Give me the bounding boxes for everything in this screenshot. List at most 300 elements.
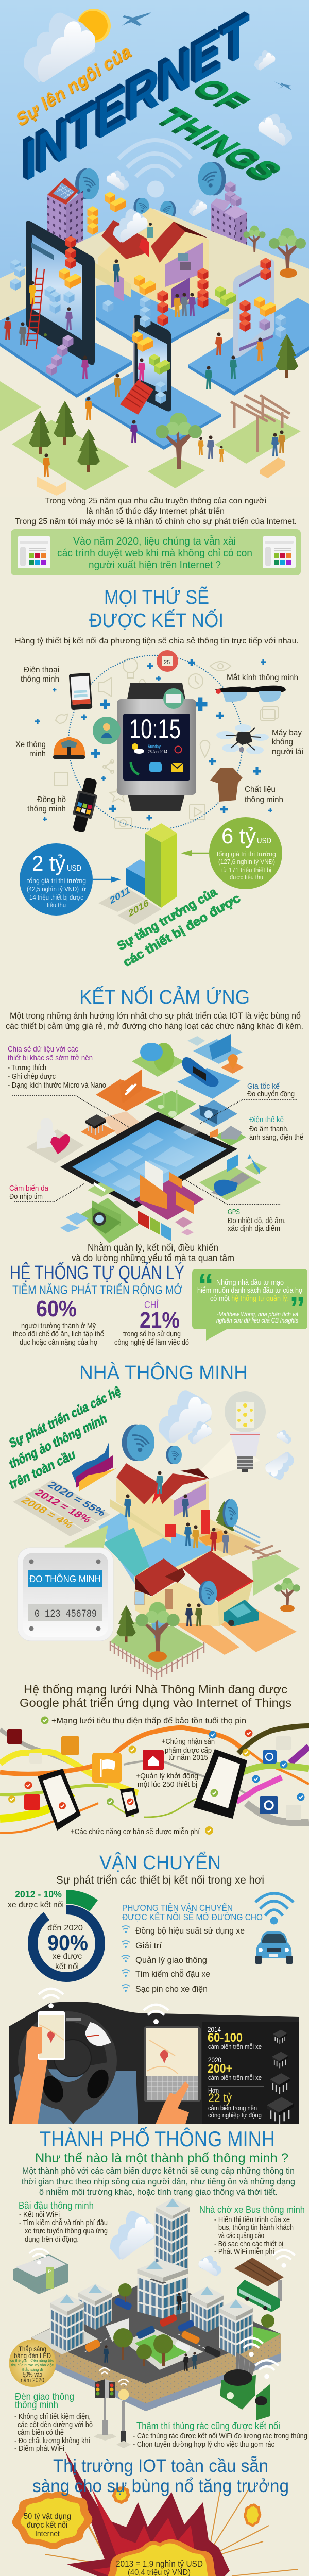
text: intro line 2: là nhân tố thúc đẩy Internet phát triển [87,506,225,516]
vehicles and trees [84,2283,274,2371]
explosion red [49,2488,249,2576]
text: smart city description: ô nhiễm môi trường khác, hoặc tình trạng giao thông và thời tiết. [39,2187,278,2197]
callout: 2 tỷ: 14 triệu thiết bị được [29,893,83,901]
heading: connected vehicles: ĐƯỢC KẾT NỐI SẼ MỞ ĐƯỜNG CHO [122,1911,263,1922]
label: bus stop: - Bộ sạc cho các thiết bị [214,2240,283,2248]
benches [37,457,285,496]
pads [98,887,161,925]
subheading: TIỀM NĂNG PHÁT TRIỂN RỘNG MỞ [12,1282,182,1297]
sensor stats: 2014 [208,2025,221,2033]
label: data sharing: Chia sẻ dữ liệu với các [8,1045,78,1054]
label: cảm biến da: Đo nhịp tim [9,1192,43,1201]
panel: sensor tablet diagram [8,1034,304,1243]
device: center phone [134,315,171,411]
label: đồng hồ: Đồng hồ [37,795,66,804]
tile icons [138,1211,171,1241]
subheading: what is smart city: Như thế nào là một thành phố thông minh ? [35,2151,288,2165]
wifi dumpster [239,2338,279,2379]
text: certification: từ năm 2015 [168,1753,208,1762]
list: vehicle benefits: Đồng bộ hiệu suất sử dụng xe [135,1926,245,1936]
sensor stats: Hơn [208,2086,219,2094]
callout: investor quote: có một hệ thống tự quản lý. [210,1295,289,1303]
icon: wifi bus [272,2250,295,2268]
stat: 60%: 60% [36,1296,77,1321]
icon: browser left [18,536,50,568]
text: google network: Hệ thống mạng lưới Nhà Thông Minh đang được [24,1683,287,1696]
label: máy bay: Máy bay [272,728,302,737]
small blasts [41,2486,289,2576]
text: google network [20,1683,291,1709]
lawns [0,381,301,490]
label: traffic lights: - Điểm phát WiFi [14,2445,64,2453]
icon: traffic light [94,2379,116,2441]
label: điện thế kế [249,1115,304,1142]
blast: 50 tỷ [12,2491,92,2549]
label: bus stop [199,2205,305,2256]
text: certification: +Chứng nhận sản [162,1737,215,1746]
text: market forecast [116,2558,203,2576]
text: certification [162,1737,215,1762]
device: smart meter: 0 123 456789 [35,1608,97,1620]
chart: wearable growth [20,817,282,970]
check badges [8,1729,305,1809]
stat: 60%: theo dõi chế độ ăn, lịch tập thể [13,1330,104,1338]
label: parking: - Tìm kiếm chỗ và tính phí đậu [19,2218,108,2227]
house [95,208,209,312]
led circle: có thể giảm điện năng tiêu [10,2359,54,2363]
label: traffic lights: cảm biến có thể [18,2429,64,2437]
smart house cutaway [64,1440,300,1680]
device: fitness band [69,776,101,834]
caption: smart ecosystems: trên toàn cầu [7,1447,78,1492]
icon: wifi disc [122,1425,154,1461]
callout: investor quote: ” [289,1291,305,1326]
label: bus stop: và các quảng cáo [218,2232,264,2240]
device: drone [216,724,269,754]
list: vehicle benefits: Tìm kiếm chỗ đậu xe [135,1969,210,1979]
stat: 60%: dục hoặc cân nặng của họ [20,1338,97,1347]
center tablet [144,2026,201,2102]
label: data sharing: thiết bị khác sẽ sớm trở nên [8,1054,93,1062]
led circle [9,2340,56,2387]
explosion orange [100,2539,221,2576]
heading: mọi thứ sẽ được kết nối [89,586,224,632]
faint icons [54,658,278,829]
label: gia tốc kế [247,1082,295,1098]
led circle: 50% vào [23,2371,42,2378]
label: xe: minh [29,750,46,758]
ladder [26,268,44,349]
label: bus stop: bus, thông tin hành khách [218,2224,294,2232]
icon: bus [237,2280,280,2312]
label: gps [228,1208,286,1233]
city ground [31,2277,281,2411]
icon: browser right [263,536,296,568]
callout: investor quote: -Matthew Wong, nhà phân tích và [217,1312,299,1318]
label 2011: 2011 [109,884,131,906]
callout: 2 tỷ: tổng giá trị thị trường [27,877,86,885]
text: sensors intro: Một trong những ảnh hưởng lớn nhất cho sự phát triển của IOT là việc bùng nổ [10,1011,301,1021]
stat strips [13,1480,110,1536]
stat strips: 2020 = 55% [45,1480,109,1518]
label: garbage: - Chọn tuyến đường hợp lý cho việc thu gom rác [133,2441,274,2449]
stat: 21%: công nghệ để làm việc đó [114,1338,189,1347]
callout: 6 tỷ: từ 171 triệu thiết bị [221,866,271,874]
right hand [156,2081,189,2124]
led circle: thắp sáng đi [22,2367,43,2372]
label: traffic lights: - Không chỉ tiết kiệm điện, [14,2413,91,2421]
callout: investor quote: “ [198,1268,214,1303]
panel: hero illustration [0,0,309,497]
title: THINGS: THINGS [150,103,290,184]
sky [0,0,309,278]
building: right towers [211,181,247,270]
sensor stats [208,2025,264,2119]
label: máy bay [272,728,303,756]
label: traffic lights: thông minh [15,2400,58,2411]
label: parking: Bãi đậu thông minh [19,2200,94,2211]
list: vehicle benefits: Sạc pin cho xe điện [135,1984,208,1994]
small clouds [107,50,292,216]
icon: street lamp [116,2389,131,2448]
device: tablet [26,221,95,365]
label: 2020: 90% [47,1930,88,1955]
label: 2012: xe được kết nối [8,1901,64,1909]
dotted leaders [13,1096,297,1204]
pergola [231,395,290,452]
panel: market explosion [7,2451,298,2576]
check item: low power: +Mạng lưới tiêu thụ điện thấp để bảo tồn tuổi thọ pin [52,1717,246,1725]
wifi street [99,2368,129,2385]
label: chất liệu: Chất liệu [245,785,276,794]
sensor stats: cảm biến trong nền [208,2104,257,2112]
icon: parking building: P [48,2269,51,2274]
heading: nhà thông minh: NHÀ THÔNG MINH [79,1361,248,1384]
label: 2020: kết nối [55,1962,79,1971]
device: smartwatch: 26 Jan 2014 [148,749,167,754]
label: parking: xe trực tuyến thông qua ứng [25,2227,108,2235]
heading: mọi thứ sẽ được kết nối: MỌI THỨ SẼ [104,586,209,608]
text: sensors intro [6,1011,303,1031]
label: data sharing: - Dạng kích thước Micro và Nano [8,1081,106,1090]
explosion spikes [7,2451,284,2576]
text: intro line 3: Trong 25 năm tới máy móc sẽ là nhân tố chính cho sự phát triển của Internet. [15,517,297,526]
sensor stats: 22 tỷ [208,2091,232,2105]
app icons [7,1729,301,1820]
people [4,259,285,477]
text: smart city description: Một thành phố với các cảm biến được kết nối sẽ cung cấp những thông tin [22,2166,295,2176]
callout: 6 tỷ: tổng giá trị thị trường [217,850,276,858]
heading: kết nối cảm ứng: KẾT NỐI CẢM ỨNG [79,985,250,1008]
caption: smart ecosystems: thống ảo thông minh [7,1411,110,1471]
text: activation: một lúc 250 thiết bị [138,1780,197,1789]
icon: bus shelter [234,2258,284,2301]
label: gia tốc kế: Gia tốc kế [247,1082,280,1091]
callout: 6 tỷ: 6 tỷ [221,824,256,848]
clouds [110,2211,221,2276]
text: google network: Google phát triển ứng dụng vào Internet of Things [20,1696,291,1709]
device: smartwatch: 10:15 [129,714,181,744]
chart: connected cars donut [8,1889,100,1977]
bubbles: 25 [164,659,170,666]
callout: investor quote: nghiên cứu dữ liệu của CB Insights [216,1318,298,1324]
icon: blue car [255,1931,293,1964]
heading: connected vehicles [122,1902,263,1922]
led circle: Thắp sáng [19,2345,46,2353]
building: left tower with solar roof [47,178,83,265]
label: điện thoại: Điện thoại [24,666,59,674]
text: free features: +Các chức năng cơ bản sẽ được miễn phí [71,1827,200,1836]
driver shirt [14,2069,138,2124]
device: phone [69,673,92,710]
led circle: năm 2020 [21,2377,44,2384]
panel: connected devices [15,650,303,834]
label: parking: dụng trên di động. [25,2235,79,2244]
callout: 2 tỷ: 2 tỷ [32,851,65,875]
purple steps [46,335,73,376]
label: garbage: Thậm thí thùng rác cũng được kết nối [136,2421,280,2432]
label: traffic lights [14,2392,93,2453]
label: 2020: đến 2020 [47,1924,83,1933]
plus signs [35,659,272,821]
callout: 6 tỷ: (127,6 nghìn tỷ VNĐ) [218,858,275,866]
label: cảm biến da [9,1184,49,1201]
text: smart city description [22,2166,295,2197]
device: car [53,737,85,759]
heading: global IOT market [32,2456,289,2496]
sensor stats: 2020 [208,2056,221,2064]
panel: dashboard [9,1989,299,2124]
list: vehicle benefits: Giải trí [135,1941,162,1951]
led circle: bằng đèn LED [14,2352,51,2360]
callout: 2 tỷ: USD [67,864,81,873]
buildings [50,2198,253,2357]
text: smart city description: thời gian thực theo nhịp sống của người dân, như tiếng ồn và những dạng [22,2177,295,2187]
left arm and phone [12,2011,65,2124]
chart: area growth [72,1442,116,1492]
speedometer [66,2018,111,2046]
label: xe: Xe thông [15,740,46,749]
label: gia tốc kế: Đo chuyển động [247,1090,295,1098]
tile: house [210,1126,246,1146]
tile: key [88,1182,115,1197]
text: sensors intro: các thiết bị cảm ứng giá rẻ, mở đường cho hàng loạt các chức năng khác đi kèm. [6,1022,303,1031]
label 2016: 2016 [128,897,150,919]
heading: global IOT market: Thị trường IOT toàn cầu sẵn [53,2456,268,2476]
device: right phone [233,259,274,358]
label: chất liệu: thông minh [245,795,283,804]
label: bus stop: - Phát WiFi miễn phí [214,2247,274,2256]
text: subtitle: Hàng tỷ thiết bị kết nối đa phương tiện sẽ chia sẻ thông tin trực tiếp với nhau. [15,637,299,646]
caption: wearable growth: các thiết bị đeo được [121,891,243,970]
heading: global IOT market: sàng cho sự bùng nổ tăng trưởng [32,2476,289,2496]
label: đồng hồ: thông minh [27,805,66,814]
label: xe [15,740,46,758]
label: data sharing: - Tương thích [8,1063,46,1072]
rays [45,2490,298,2576]
ribbons [0,1726,309,1833]
label: điện thế kế: Điện thế kế [249,1115,284,1124]
icon: cloud over house [113,209,148,243]
callout: 2 tỷ: (42,5 nghìn tỷ VNĐ) từ [27,885,86,893]
label: điện thế kế: Đo âm thanh, [249,1125,289,1133]
list: vehicle benefits [122,1926,245,1994]
lower ground [0,319,309,497]
wifi discs [75,162,226,219]
text: intro line 1: Trong vòng 25 năm qua nhu cầu truyền thông của con người [45,497,266,505]
label: data sharing: - Ghi chép được [8,1072,56,1081]
icon: dumpster [220,2352,270,2420]
label: gps: GPS [228,1208,240,1216]
icon: parking building [13,2254,68,2294]
label: mắt kính: Mắt kính thông minh [227,673,298,682]
explosion yellow [108,2543,213,2576]
blast: 50 tỷ: 50 tỷ vật dụng [24,2512,71,2521]
panel: browser question [11,529,301,575]
stat: 21%: CHỈ [144,1299,159,1310]
caption: smart ecosystems: Sự phát triển của các hệ [7,1384,124,1450]
stat: 60% [13,1296,104,1347]
floating tiles [26,1034,244,1163]
label: 2020: xe được [53,1952,82,1961]
stat: 60%: người trưởng thành ở Mỹ [21,1321,96,1330]
sensor stats: 60-100 [208,2031,243,2045]
led circle: thụ của nước Mỹ vào việc [11,2363,54,2367]
heading: connected vehicles: PHƯƠNG TIỆN VẬN CHUYỂN [122,1902,233,1913]
text: activation: +Quản lý khởi động [136,1772,198,1781]
icon: wifi [255,1893,294,1925]
icon: smart bulb [225,1391,266,1472]
tile: navigation [199,1154,267,1200]
text: question: Vào năm 2020, liệu chúng ta vẫn xài [73,535,236,547]
caption: wearable growth: Sự tăng trưởng của [115,885,219,953]
text: activation [136,1772,198,1789]
dotted ring [68,655,243,829]
title: Sự lên ngôi của: Sự lên ngôi của [14,40,133,131]
callout: 6 tỷ: được tiêu thụ [230,873,263,881]
label: đồng hồ [27,795,66,814]
heading: vận chuyển: VẬN CHUYỂN [99,1851,221,1874]
label: 2020 [47,1924,88,1971]
title: INTERNET: INTERNET [25,2,250,194]
wifi tablet [144,2005,168,2024]
text: purpose [72,1242,234,1264]
icon: big cloud [24,13,95,82]
chips [267,2030,294,2124]
panel: network ribbons [0,1726,309,1836]
segment: 10 percent [66,1890,98,1911]
icon: sun [77,9,111,43]
subheading: vehicles: Sự phát triển các thiết bị kết nối trong xe hơi [56,1874,264,1886]
label: data sharing [8,1045,106,1090]
sensor stats: cảm biến trên mỗi xe [208,2074,262,2081]
device: glasses [215,686,286,702]
wifi phone [39,1989,63,2008]
text: certification: phẩm được cấp [165,1746,212,1755]
red stairs [120,380,153,415]
trees [29,226,306,472]
label: điện thoại: thông minh [21,675,59,684]
sensor stats: cảm biến trên mỗi xe [208,2043,262,2050]
phones [38,1749,247,1831]
tetris blocks [10,192,286,404]
device: smart meter: ĐO THÔNG MINH [29,1573,101,1584]
label: parking: - Kết nối WiFi [19,2211,60,2219]
panel: smart city illustration [9,2198,307,2453]
icon: plane small [274,81,291,90]
icon: wifi parking [29,2249,49,2264]
clouds [159,1390,294,1480]
title: OF: OF [187,74,258,115]
bubbles [93,650,184,744]
text: purpose: Nhằm quản lý, kết nối, điều khiển [88,1242,218,1253]
blast: 50 tỷ: được kết nối [27,2521,67,2530]
callout: 2 tỷ [20,843,121,916]
text: purpose: và đo lường những yếu tố mà ta quan tâm [72,1253,234,1264]
ground [0,209,309,495]
label: garbage [133,2421,307,2449]
label: traffic lights: các cột đèn đường với bộ [18,2421,93,2429]
device: smart meter [18,1548,113,1641]
label: máy bay: không [272,738,293,747]
bar 2016 [145,823,177,908]
steering wheel [23,2016,116,2124]
label: máy bay: người lái [272,748,303,756]
callout: 2 tỷ: tiêu thụ [47,901,66,909]
device: tablet [60,1112,237,1208]
label: 2012: 2012 - 10% [15,1889,62,1900]
tile: mail [134,1160,204,1220]
heading: mọi thứ sẽ được kết nối: ĐƯỢC KẾT NỐI [89,608,224,632]
device: t-shirt [210,768,243,802]
label: traffic lights: - Đo chất lượng không khí [14,2437,90,2445]
label: parking [19,2200,108,2244]
label: traffic lights: Đèn giao thông [15,2392,74,2402]
list: vehicle benefits: Quản lý giao thông [135,1955,207,1965]
callout: 6 tỷ [181,817,282,889]
device: smartwatch: Sunday [148,744,161,749]
icon: plane [122,12,151,26]
text: market forecast: 2013 = 1,9 nghìn tỷ USD [116,2558,203,2569]
text: question: người xuất hiện trên Internet ? [89,560,221,571]
stat: 21%: trong số họ sử dụng [123,1330,181,1338]
label: bus stop: - Hiển thị tiến trình của xe [214,2216,290,2224]
text: question: các trình duyệt web khi mà không chỉ có con [57,548,252,559]
text: question [57,535,252,571]
icon: big wifi [118,140,191,198]
label: chất liệu [245,785,283,804]
label: điện thoại [21,666,59,684]
stat: 21% [114,1299,189,1347]
callout: investor quote [192,1268,307,1341]
label: cảm biến da: Cảm biến da [9,1184,49,1193]
icon: cloud disc [166,1446,182,1464]
caption: smart ecosystems [7,1384,124,1492]
label: gps: Đo nhiệt độ, độ ẩm, [228,1216,286,1225]
stat: 21%: 21% [140,1308,180,1333]
label: 2012 [8,1889,64,1909]
sensor stats: công nghiệp tự động [208,2111,262,2119]
stat strips: 2008 = 4% [19,1496,76,1530]
blast: 50 tỷ: Internet [35,2530,60,2538]
heading: thành phố thông minh: THÀNH PHỐ THÔNG MINH [40,2126,275,2151]
heading: hệ thống tự quản lý: HỆ THỐNG TỰ QUẢN LÝ [10,1261,184,1284]
label: gps: xác định địa điểm [228,1224,280,1233]
platforms [0,278,309,450]
tile: camera [60,1198,194,1243]
device: smartwatch [117,683,196,811]
bar 2011 [126,859,149,895]
